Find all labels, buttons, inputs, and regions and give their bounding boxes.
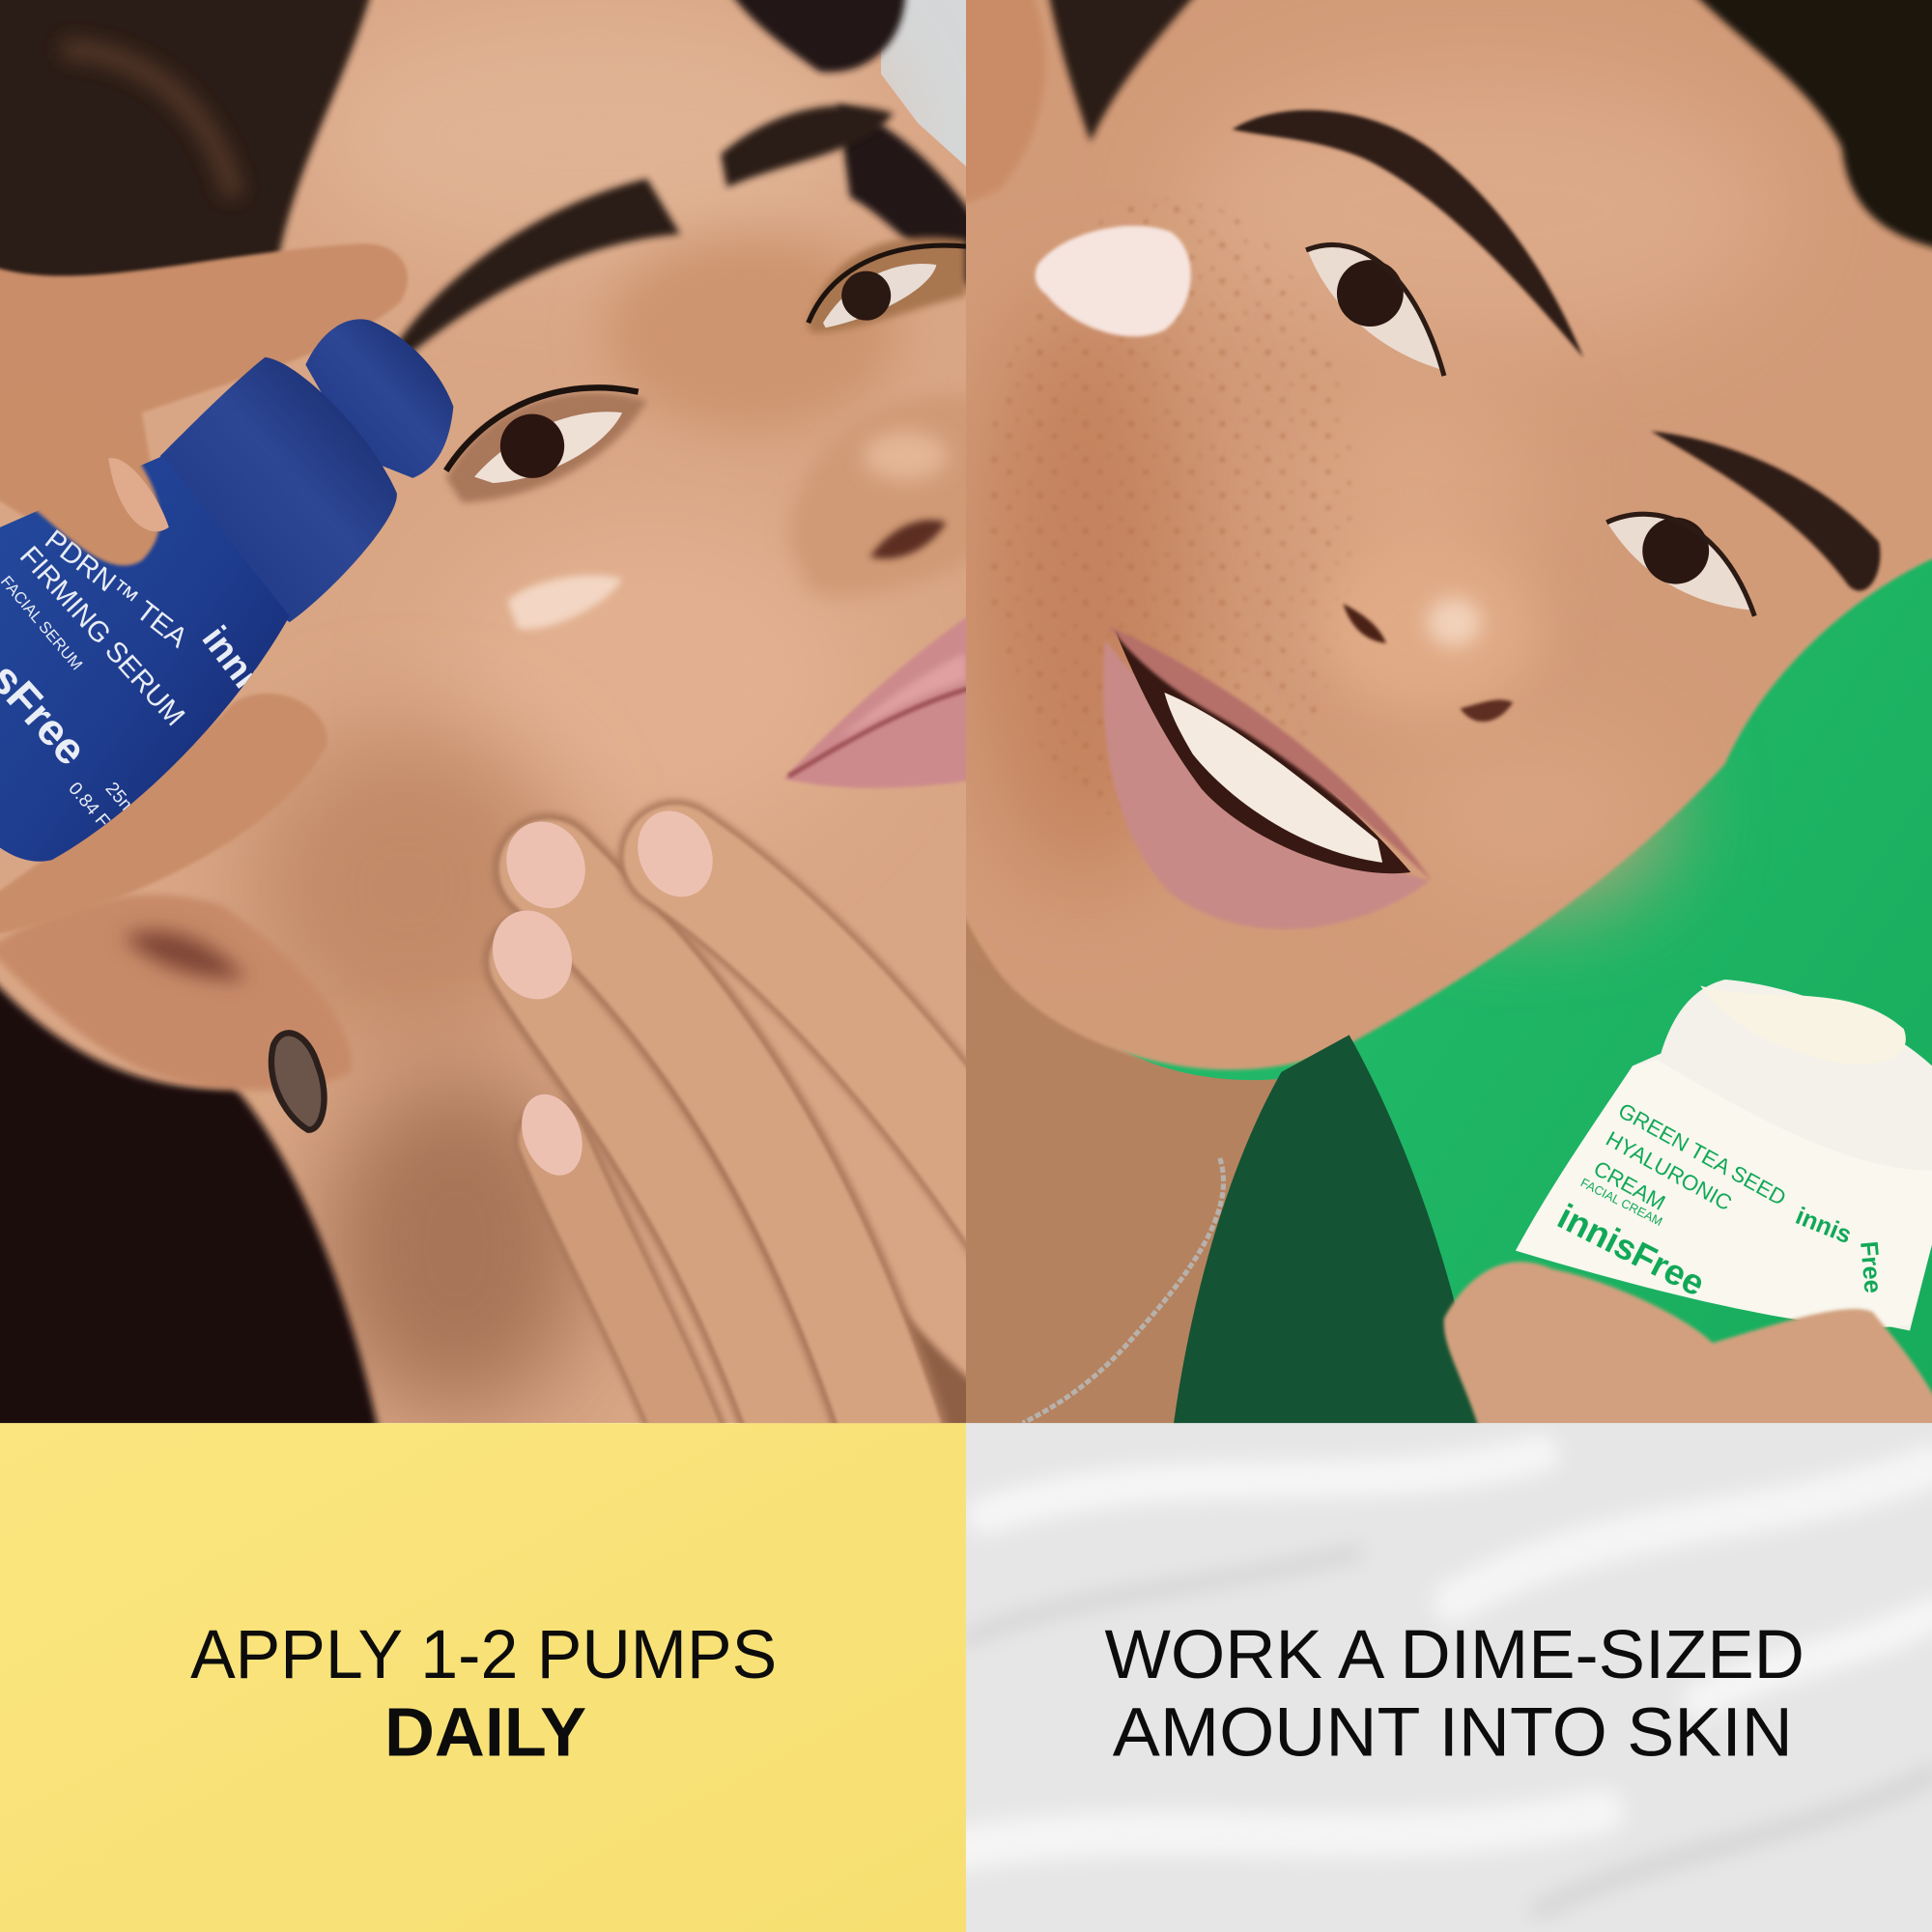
eyebrow: upper: [721, 105, 894, 187]
jar label: Free: [1855, 1240, 1887, 1294]
jar label: GREEN TEA SEED: [1614, 1098, 1790, 1210]
neck: [936, 863, 1288, 1448]
fingernails: [493, 809, 599, 922]
thumb on bottle: [0, 389, 160, 565]
bottle label: 25ml: [101, 779, 142, 822]
earring: [271, 1033, 325, 1130]
jar body: [1516, 1060, 1932, 1327]
cream in jar: [1700, 985, 1906, 1065]
bottle label: innis: [194, 618, 279, 712]
jar label: [1551, 1098, 1887, 1304]
bottle collar: [160, 357, 397, 622]
face shading: [246, 13, 899, 1417]
bottle label: FIRMING SERUM: [14, 540, 191, 732]
mouth interior: [1115, 631, 1410, 873]
jar neck: [1602, 980, 1932, 1331]
necklace: [1023, 1158, 1224, 1423]
eye: upper: [807, 238, 966, 332]
jar label: innis: [1792, 1203, 1856, 1249]
nose: [788, 393, 985, 597]
fingernail on bottle: [108, 458, 169, 531]
text: serum directions: [190, 1616, 777, 1772]
smile: [1103, 626, 1432, 929]
panel: serum photo: [0, 0, 1023, 1454]
lower lip: [1103, 640, 1430, 929]
face shading: [974, 74, 1775, 899]
bottle neck: [305, 319, 453, 478]
upper lip: [1109, 626, 1432, 881]
bottle label: PDRN™ TEA: [39, 524, 194, 654]
jar label: CREAM: [1590, 1156, 1669, 1215]
serum on cheek: [508, 576, 622, 629]
hand holding jar: [1444, 1262, 1932, 1448]
bottle label: 0.84 Fl.: [64, 779, 119, 838]
bottle label: [0, 524, 279, 838]
panel: yellow instruction: [0, 1423, 966, 1932]
eyebrow: lower: [394, 179, 680, 355]
hand: holding bottle: [0, 243, 408, 936]
teeth: [1164, 693, 1382, 863]
ear: [0, 895, 352, 1091]
text: cream directions: WORK A DIME-SIZED: [1104, 1616, 1804, 1693]
cream jar: [1516, 980, 1932, 1331]
hand: on cheek: [478, 799, 1023, 1454]
eye: right: [1606, 514, 1754, 616]
face: [936, 0, 1932, 1069]
panel: gray instruction: [966, 1423, 1932, 1932]
hair top: [1047, 0, 1202, 142]
bottle body: [0, 456, 290, 862]
lips: [784, 616, 966, 789]
text: serum directions: APPLY 1-2 PUMPS: [190, 1616, 777, 1693]
nose: [1319, 542, 1540, 722]
jar label: innisFree: [1551, 1196, 1711, 1304]
jacket: [1171, 1035, 1485, 1448]
cream swatch: [1036, 226, 1191, 336]
background top right: [881, 0, 966, 166]
cream texture: [966, 1454, 1932, 1910]
eye: lower: [446, 387, 647, 502]
ear: [949, 0, 1045, 210]
eye: left: [1306, 244, 1444, 376]
serum bottle: [0, 319, 453, 862]
panel: cream photo: [936, 0, 1932, 1448]
text: cream directions: [1104, 1616, 1804, 1772]
jar label: FACIAL CREAM: [1578, 1175, 1665, 1229]
eyebrow: left: [1233, 110, 1583, 357]
hair: [0, 0, 985, 1448]
text: serum directions: DAILY: [384, 1694, 586, 1772]
curly hair: [1688, 0, 1932, 252]
eyebrow: right: [1651, 431, 1880, 591]
jar label: HYALURONIC: [1602, 1126, 1736, 1215]
text: cream directions: AMOUNT INTO SKIN: [1113, 1694, 1793, 1772]
